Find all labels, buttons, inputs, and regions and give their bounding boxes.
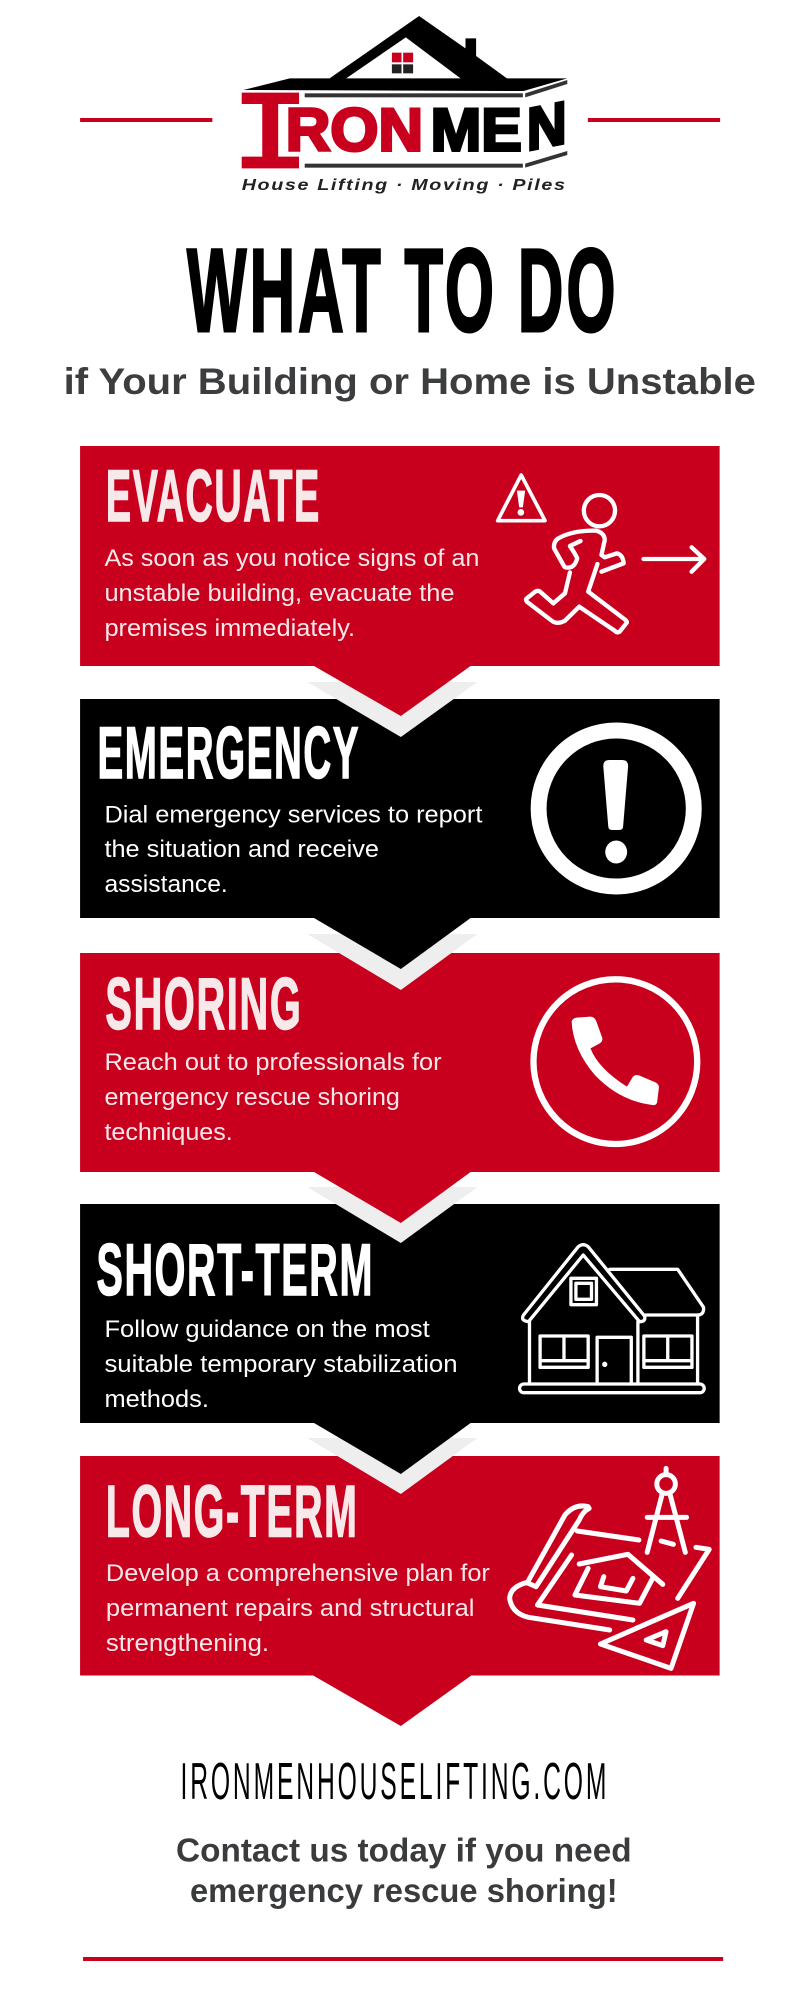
body text: Develop a comprehensive plan for xyxy=(106,1560,490,1587)
blueprint house xyxy=(579,1554,663,1584)
connector arrow: shoring to short-term xyxy=(307,1171,477,1243)
heading: shoring: SHORING xyxy=(105,964,302,1045)
runner head xyxy=(584,495,615,526)
heading: long-term: LONG-TERM xyxy=(106,1471,359,1553)
left header rule xyxy=(80,118,212,122)
body text xyxy=(104,1316,458,1413)
panel background xyxy=(80,1456,720,1676)
connector arrow: short-term to long-term xyxy=(307,1422,477,1494)
closing call to action: Contact us today if you need xyxy=(176,1831,632,1869)
panel background xyxy=(80,699,720,918)
body text: Dial emergency services to report xyxy=(104,801,483,829)
logo tagline: House Lifting · Moving · Piles xyxy=(242,177,567,194)
panel: emergency xyxy=(80,699,720,918)
body text: assistance. xyxy=(104,871,228,898)
logo window xyxy=(392,53,413,73)
body text: methods. xyxy=(104,1386,209,1413)
connector arrow: emergency to shoring xyxy=(307,917,477,990)
compass xyxy=(657,1475,675,1493)
subtitle: if Your Building or Home is Unstable xyxy=(64,361,756,402)
body text xyxy=(104,545,479,642)
logo gable xyxy=(346,37,461,78)
exit arrow xyxy=(644,547,704,572)
body text xyxy=(104,1049,442,1146)
logo beam lines xyxy=(305,80,567,168)
warning triangle xyxy=(498,475,545,521)
icon: exclamation in circle xyxy=(539,730,694,886)
footer rule xyxy=(83,1957,723,1961)
heading: emergency: EMERGENCY xyxy=(97,713,360,794)
logo I-beam xyxy=(242,93,299,168)
panel background xyxy=(80,1204,720,1423)
panel background xyxy=(80,446,720,666)
body text: premises immediately. xyxy=(104,615,355,642)
body text: strengthening. xyxy=(106,1630,269,1657)
body text: Follow guidance on the most xyxy=(104,1316,430,1343)
runner legs xyxy=(526,564,627,632)
logo wordmark ME: ME xyxy=(431,97,522,164)
icon: blueprint, compass and set square xyxy=(510,1468,709,1668)
set square xyxy=(600,1603,694,1668)
body text: As soon as you notice signs of an xyxy=(104,545,479,572)
logo roof xyxy=(243,16,567,91)
warning mark xyxy=(517,491,525,516)
panel: shoring xyxy=(80,953,720,1172)
body text: permanent repairs and structural xyxy=(106,1595,474,1622)
closing call to action: emergency rescue shoring! xyxy=(190,1872,618,1909)
heading: short-term: SHORT-TERM xyxy=(96,1230,374,1311)
logo wordmark RON: RON xyxy=(286,97,423,164)
icon: house xyxy=(520,1245,704,1393)
body text: techniques. xyxy=(104,1119,233,1146)
panel: long-term xyxy=(80,1456,720,1676)
icon: warning and running person xyxy=(498,475,704,632)
heading: evacuate: EVACUATE xyxy=(106,456,321,537)
logo: Ironmen xyxy=(242,16,567,194)
logo wordmark N: N xyxy=(527,88,567,164)
body text xyxy=(104,801,483,898)
body text xyxy=(106,1560,490,1657)
body text: the situation and receive xyxy=(104,836,379,863)
connector arrow: evacuate to emergency xyxy=(307,665,477,737)
body text: Reach out to professionals for xyxy=(104,1049,442,1076)
panel: evacuate xyxy=(80,446,720,666)
body text: emergency rescue shoring xyxy=(104,1084,400,1111)
panel background xyxy=(80,953,720,1172)
runner torso xyxy=(554,531,624,572)
body text: unstable building, evacuate the xyxy=(104,580,455,607)
panel: short-term xyxy=(80,1204,720,1423)
blueprint sheet xyxy=(510,1506,610,1630)
final arrow xyxy=(312,1675,472,1726)
closing call to action xyxy=(176,1831,632,1909)
icon: phone in circle xyxy=(533,979,697,1144)
right header rule xyxy=(588,118,720,122)
body text: suitable temporary stabilization xyxy=(104,1351,458,1378)
